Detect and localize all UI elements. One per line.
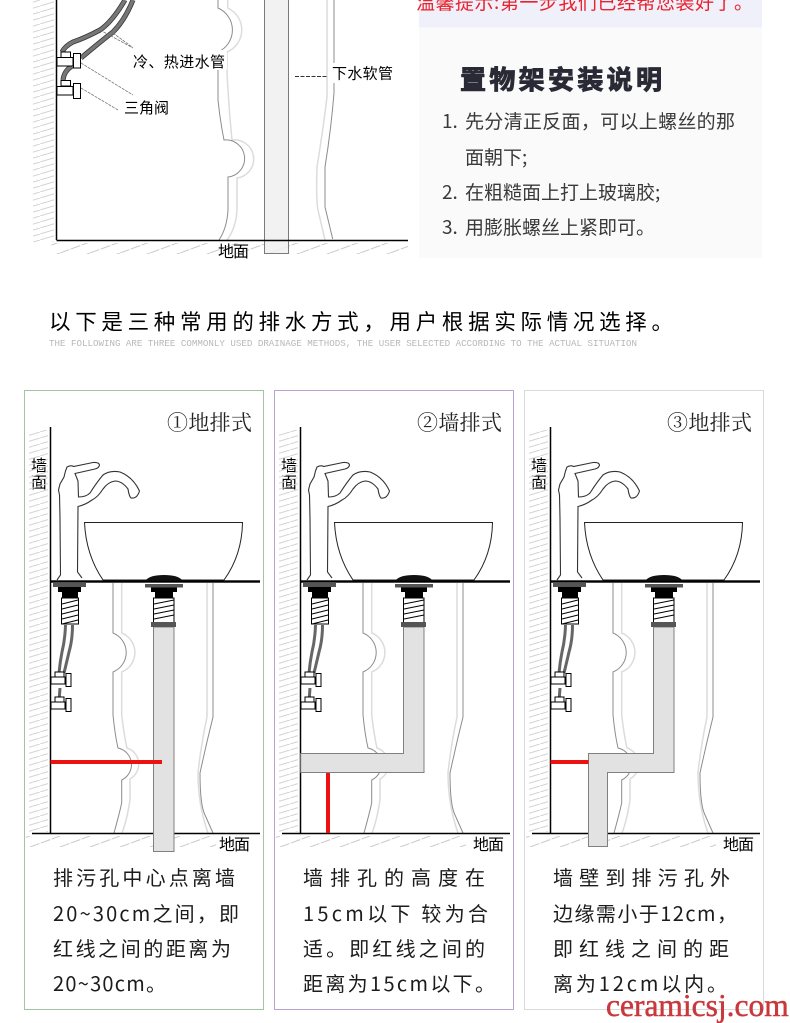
english subtitle: THE FOLLOWING ARE THREE COMMONLY USED DRAINAGE METHODS, THE USER SELECTED ACCORDING TO THE ACTUAL SITUATION xyxy=(49,339,637,349)
caption: 墙壁到排污孔外 xyxy=(553,862,730,891)
title: ②墙排式 xyxy=(417,407,502,437)
label: wall xyxy=(281,452,297,493)
red distance line xyxy=(550,760,588,764)
instruction list xyxy=(442,107,735,240)
red height line xyxy=(326,773,330,833)
caption: 排污孔中心点离墙 xyxy=(53,862,235,891)
title: ③地排式 xyxy=(667,407,752,437)
label: water pipes: 冷、热进水管 xyxy=(133,51,225,72)
pipe collar xyxy=(651,622,676,627)
label: floor: 地面 xyxy=(473,831,504,855)
sink, faucet and pedestal diagram xyxy=(526,427,760,847)
caption: 边缘需小于12cm， xyxy=(553,898,737,927)
caption xyxy=(303,862,495,997)
instruction list: 面朝下; xyxy=(465,143,527,170)
caption: 红线之间的距离为 xyxy=(53,933,231,962)
icon: angle valve upper xyxy=(57,52,80,68)
instruction list: 2. xyxy=(442,178,458,205)
panel: method 2 wall drain xyxy=(274,390,514,1010)
caption: 墙排孔的高度在 xyxy=(303,862,485,891)
instruction list: 3. xyxy=(442,213,458,240)
caption: 即红线之间的距 xyxy=(553,933,729,962)
caption: 15cm以下 较为合 xyxy=(303,898,488,927)
label: wall: 墙 xyxy=(531,452,547,476)
sink, faucet and pedestal diagram xyxy=(276,427,510,847)
label: wall: 墙 xyxy=(281,452,297,476)
panel: top-left sink rough-in diagram xyxy=(33,0,408,262)
caption: 离为12cm以内。 xyxy=(553,968,727,997)
label: wall xyxy=(531,452,547,493)
panel: method 1 floor drain xyxy=(24,390,264,1010)
label: floor: 地面 xyxy=(723,831,754,855)
drain hose xyxy=(264,0,288,254)
label: wall: 面 xyxy=(31,469,47,493)
heading: three drainage methods: 以下是三种常用的排水方式，用户根据实际情况选择。 xyxy=(49,306,673,336)
caption: 距离为15cm以下。 xyxy=(303,968,495,997)
label: angle valve: 三角阀 xyxy=(124,97,169,118)
label: floor: 地面 xyxy=(218,238,249,262)
caption: 适。即红线之间的 xyxy=(303,933,485,962)
drain pipe xyxy=(154,627,174,852)
icon: angle valve lower xyxy=(57,80,80,98)
red distance line xyxy=(50,760,162,764)
drain pipe xyxy=(588,627,674,846)
instruction list: 1. xyxy=(442,107,458,134)
drain pipe xyxy=(301,627,424,772)
label: wall: 墙 xyxy=(31,452,47,476)
instruction list: 先分清正反面，可以上螺丝的那 xyxy=(465,107,735,134)
label: wall: 面 xyxy=(531,469,547,493)
caption: 20~30cm之间，即 xyxy=(53,898,239,927)
label: floor: 地面 xyxy=(219,831,250,855)
label: wall xyxy=(31,452,47,493)
label: wall: 面 xyxy=(281,469,297,493)
title: ①地排式 xyxy=(167,407,252,437)
label: drain hose: 下水软管 xyxy=(332,62,393,84)
caption xyxy=(53,862,239,997)
instruction list: 在粗糙面上打上玻璃胶; xyxy=(465,178,660,205)
watermark: ceramicsj.com xyxy=(606,988,789,1023)
panel: method 3 floor drain with offset xyxy=(524,390,764,1010)
pipe collar xyxy=(151,622,176,627)
caption xyxy=(553,862,737,997)
sink, faucet and pedestal diagram xyxy=(26,427,260,847)
panel: shelf installation notes xyxy=(416,0,762,258)
heading: shelf installation: 置物架安装说明 xyxy=(460,60,662,97)
instruction list: 用膨胀螺丝上紧即可。 xyxy=(465,213,655,240)
caption: 20~30cm。 xyxy=(53,968,166,997)
pipe collar xyxy=(401,622,426,627)
